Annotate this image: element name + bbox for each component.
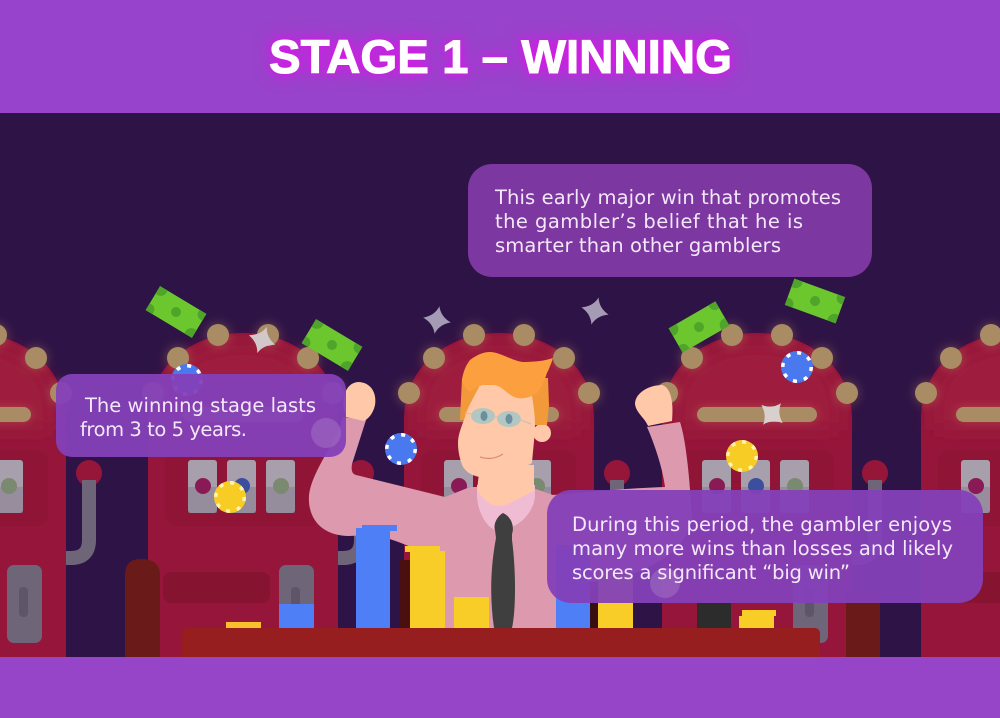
tie: [491, 513, 515, 628]
title: STAGE 1 – WINNING: [269, 30, 732, 83]
yellow low stack far right: [739, 616, 774, 628]
star 3: [578, 294, 612, 328]
blue stack tall: [356, 528, 390, 628]
slot machine right: [655, 323, 888, 657]
neck: [477, 465, 534, 506]
banknote 2: [295, 312, 369, 378]
brown pillar right: [846, 590, 880, 657]
slot machine centre: [397, 323, 630, 657]
star 2: [421, 304, 453, 336]
poker chips: [171, 351, 813, 513]
callout text: The winning stage lasts: [84, 394, 316, 417]
chip stacks on desk: [226, 525, 776, 628]
shirt: torso and arms: [309, 417, 692, 628]
gambler: [309, 352, 692, 628]
callout text: from 3 to 5 years.: [80, 418, 247, 441]
yellow chip 2: [726, 440, 758, 472]
right fist: [635, 385, 673, 426]
dark gap pieces behind stacks: [400, 560, 412, 628]
blue stack right: [556, 545, 590, 628]
callout: duration: [56, 374, 346, 457]
callout: early win: [468, 164, 872, 277]
callout text: scores a significant “big win”: [572, 561, 850, 584]
blue stack in slot: [279, 604, 314, 628]
slot machine far right: [914, 323, 1000, 657]
slot machine far left: [0, 323, 102, 657]
faded chip: [311, 418, 341, 448]
yellow stack tall: [410, 551, 445, 628]
banknote 1: [139, 279, 213, 345]
slot machine row: [0, 323, 1000, 657]
hair back: [460, 378, 549, 425]
faded chip: [650, 568, 680, 598]
floating money: [139, 272, 852, 378]
top band: [0, 0, 1000, 113]
ear: [533, 424, 551, 442]
blue chip 3: [781, 351, 813, 383]
dark gap: [590, 590, 598, 628]
night background: [0, 113, 1000, 657]
slot machine left: [141, 323, 374, 657]
glasses: [465, 408, 531, 427]
star 5: [576, 502, 604, 530]
banknote 4: [778, 272, 852, 330]
face: [458, 385, 535, 477]
hair: [462, 352, 553, 398]
banknote 3: [662, 295, 736, 359]
yellow stack right: [598, 570, 633, 628]
blue chip 2: [385, 433, 417, 465]
collar: [477, 485, 535, 530]
sparkle stars: [244, 294, 792, 530]
callout text: the gambler’s belief that he is: [495, 210, 803, 233]
callout text: During this period, the gambler enjoys: [572, 513, 952, 536]
brown pillar left: [125, 559, 160, 657]
callout text: smarter than other gamblers: [495, 234, 781, 257]
desk: [182, 628, 820, 657]
callout text: This early major win that promotes: [494, 186, 841, 209]
yellow chip thin: [226, 622, 261, 628]
star 4: [752, 394, 792, 434]
blue chip 1: [171, 364, 203, 396]
star 1: [244, 322, 280, 358]
yellow stack short: [454, 597, 489, 628]
bottom band: [0, 657, 1000, 718]
left fist: [343, 382, 375, 421]
yellow chip 1: [214, 481, 246, 513]
callout text: many more wins than losses and likely: [572, 537, 953, 560]
smile: [480, 454, 503, 458]
callout: big win: [547, 490, 983, 603]
black bar: [697, 603, 731, 628]
